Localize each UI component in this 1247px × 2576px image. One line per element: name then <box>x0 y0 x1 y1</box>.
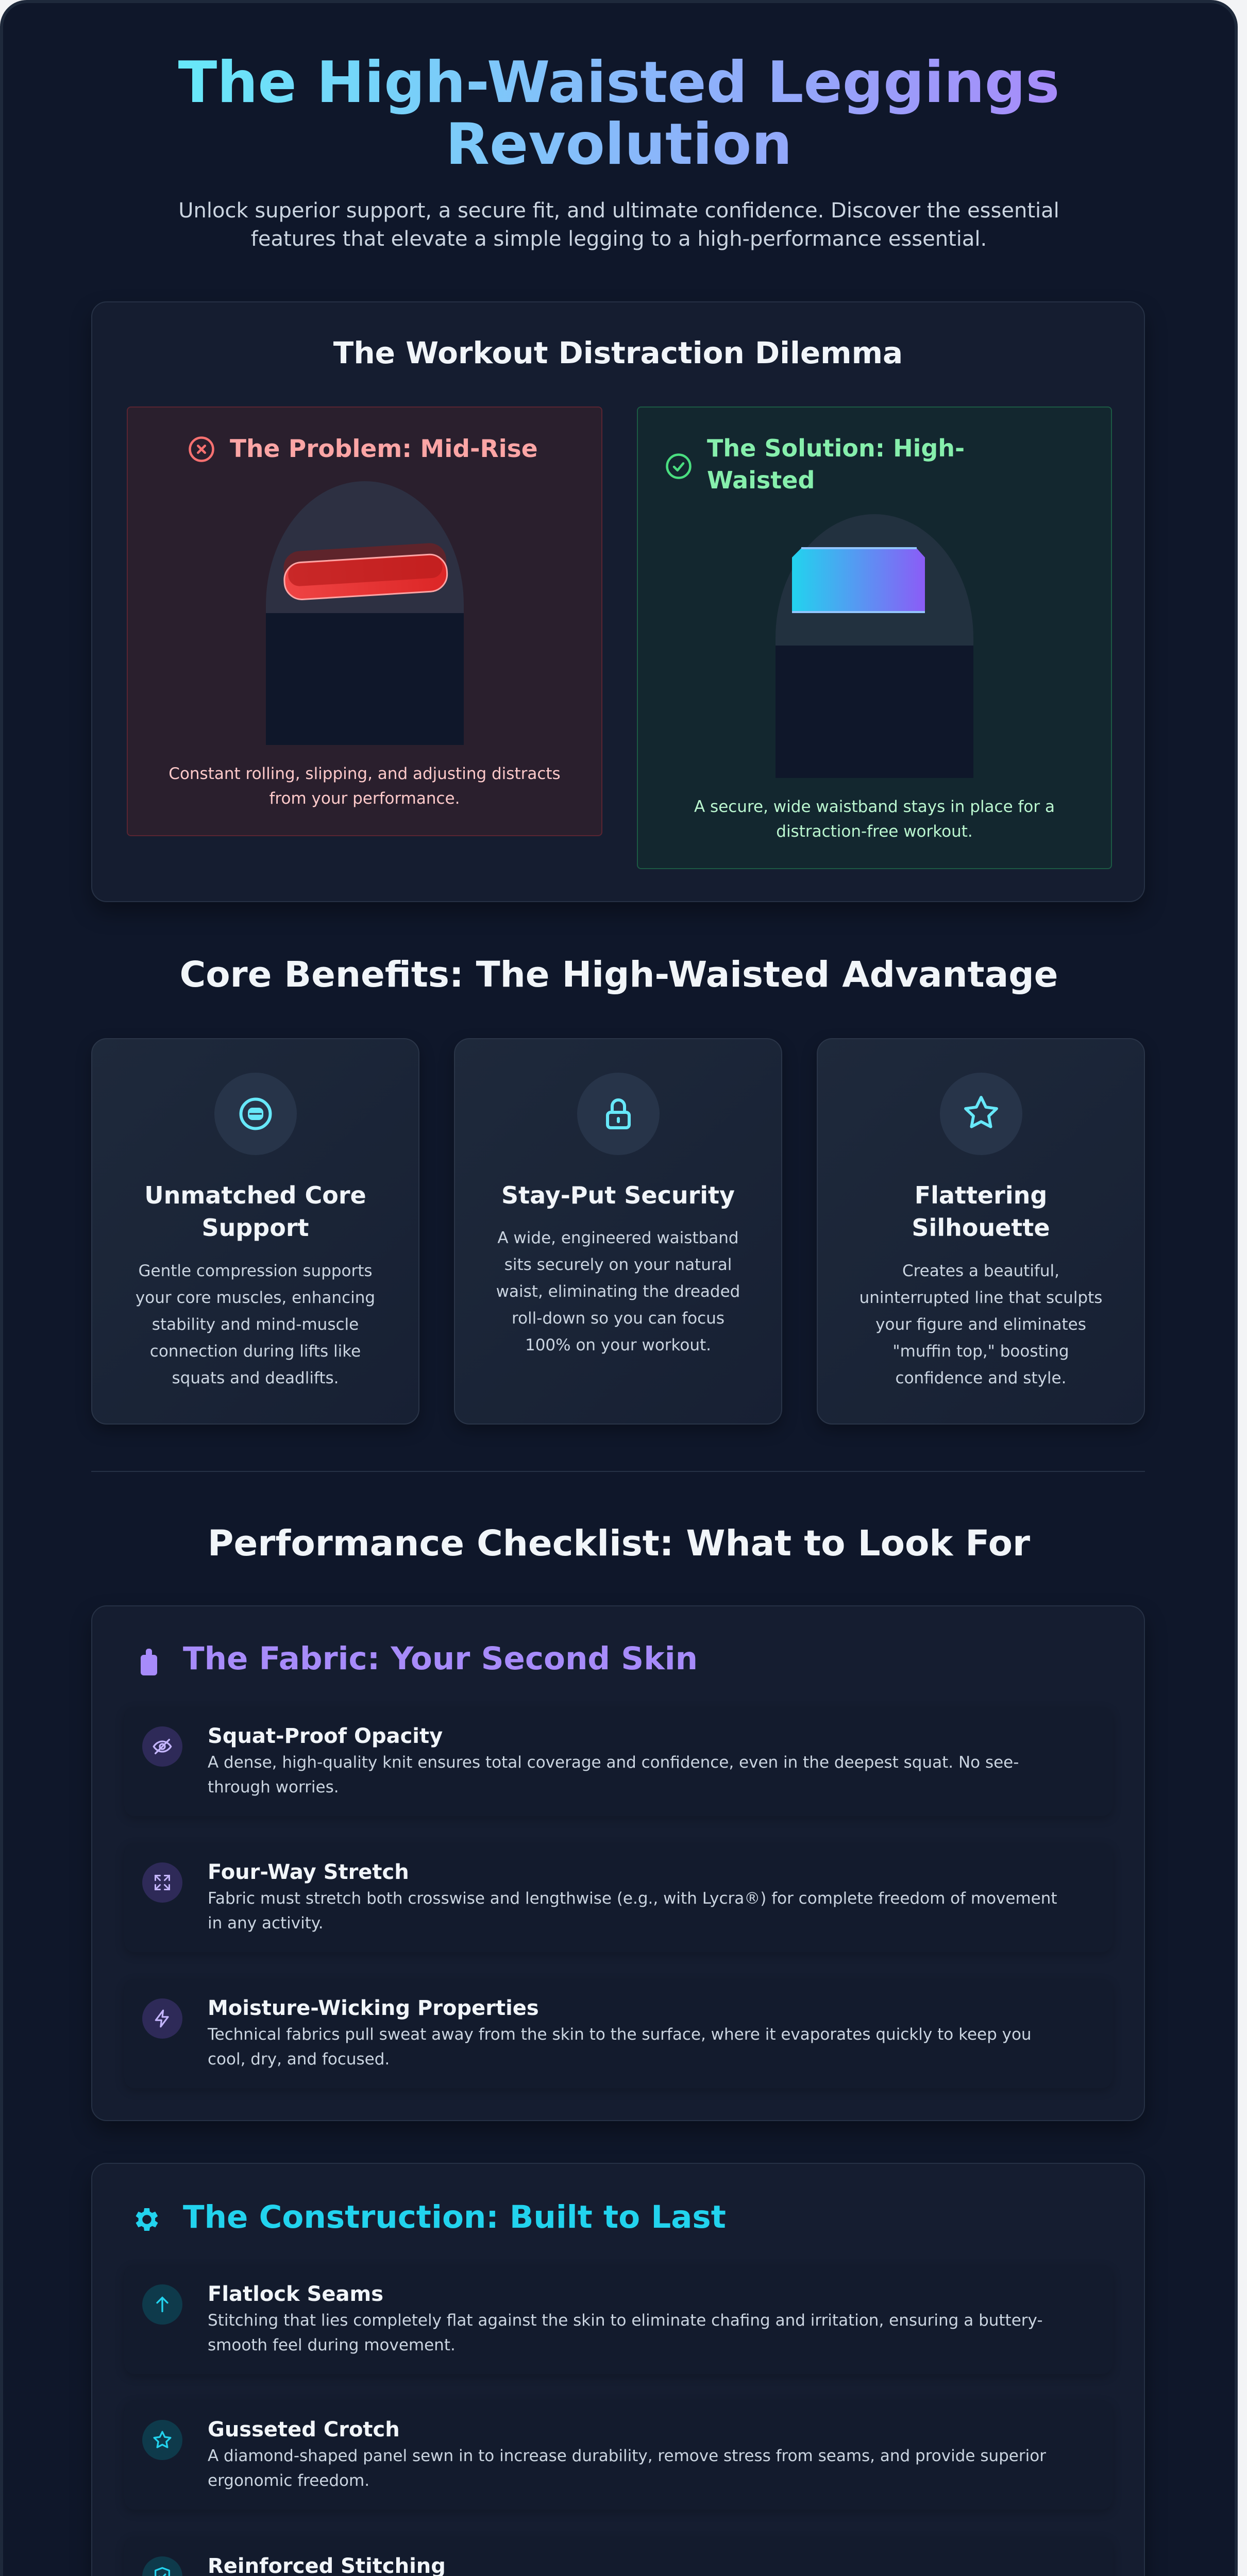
subtitle <box>178 199 1059 251</box>
title: Stay-Put Security <box>501 1181 735 1209</box>
text: squats and deadlifts. <box>172 1369 339 1387</box>
text: roll-down so you can focus <box>512 1309 724 1328</box>
item: flatlock seams: Flatlock Seams <box>208 2282 383 2306</box>
icon: star <box>142 2420 182 2460</box>
card: flattering silhouette <box>817 1038 1145 1425</box>
heading: performance checklist: Performance Checklist: What to Look For <box>208 1523 1030 1564</box>
title: Unmatched Core <box>144 1181 366 1209</box>
text: confidence and style. <box>896 1369 1066 1387</box>
illustration: mid-rise <box>266 481 464 745</box>
text: Gentle compression supports <box>138 1262 372 1280</box>
card: solution <box>637 406 1112 869</box>
panel: construction <box>91 2163 1145 2576</box>
text: Creates a beautiful, <box>902 1262 1059 1280</box>
icon: expand arrows <box>142 1862 182 1903</box>
item: squat-proof opacity <box>124 1707 1113 1816</box>
caption: solution: A secure, wide waistband stays in place for a <box>694 798 1055 816</box>
heading: solution <box>707 434 965 494</box>
text: waist, eliminating the dreaded <box>496 1282 740 1301</box>
item: four-way stretch: Four-Way Stretch <box>208 1860 409 1884</box>
heading: solution: Waisted <box>707 466 815 494</box>
text: your core muscles, enhancing <box>136 1289 375 1307</box>
item: flatlock seams: smooth feel during movement. <box>208 2336 456 2354</box>
icon: x circle <box>189 436 214 462</box>
caption: problem: Constant rolling, slipping, and adjusting distracts <box>168 765 561 783</box>
text: sits securely on your natural <box>504 1256 732 1274</box>
item: reinforced stitching <box>124 2537 1113 2576</box>
item: squat-proof opacity: Squat-Proof Opacity <box>208 1724 443 1748</box>
icon: core <box>214 1073 297 1155</box>
text <box>860 1262 1102 1387</box>
heading: construction: The Construction: Built to Last <box>183 2199 726 2235</box>
caption: problem: from your performance. <box>269 789 460 808</box>
item: squat-proof opacity: through worries. <box>208 1778 339 1797</box>
title: Flattering <box>915 1181 1047 1209</box>
icon: check circle <box>666 453 692 479</box>
text: A wide, engineered waistband <box>497 1229 739 1247</box>
item: four-way stretch <box>124 1843 1113 1952</box>
heading: dilemma: The Workout Distraction Dilemma <box>333 335 903 370</box>
item: flatlock seams: Stitching that lies completely flat against the skin to eliminate chafing and irritation, ensuring a buttery- <box>208 2311 1043 2330</box>
text <box>136 1262 375 1387</box>
item: four-way stretch: in any activity. <box>208 1914 324 1933</box>
item: gusseted crotch <box>124 2400 1113 2510</box>
text: "muffin top," boosting <box>892 1342 1069 1361</box>
subtitle: features that elevate a simple legging to a high-performance essential. <box>251 227 987 251</box>
icon: gear <box>136 2208 158 2231</box>
text: stability and mind-muscle <box>152 1315 359 1334</box>
caption: problem <box>168 765 561 808</box>
card: problem <box>127 406 602 836</box>
text: connection during lifts like <box>150 1342 361 1361</box>
card: core support <box>91 1038 419 1425</box>
text: 100% on your workout. <box>525 1336 711 1354</box>
heading: fabric: The Fabric: Your Second Skin <box>183 1640 698 1677</box>
icon: eye-off <box>142 1726 182 1767</box>
heading: problem: The Problem: Mid-Rise <box>230 435 538 463</box>
item: moisture-wicking: cool, dry, and focused. <box>208 2050 390 2069</box>
panel: workout distraction dilemma <box>91 301 1145 902</box>
icon: lightning <box>142 1998 182 2039</box>
icon: bottle <box>141 1649 157 1675</box>
text: your figure and eliminates <box>875 1315 1086 1334</box>
title: Revolution <box>446 111 792 178</box>
item: moisture-wicking: Moisture-Wicking Properties <box>208 1996 539 2020</box>
icon: star <box>940 1073 1022 1155</box>
item: gusseted crotch: Gusseted Crotch <box>208 2418 400 2442</box>
caption: solution <box>694 798 1055 841</box>
heading: core benefits: Core Benefits: The High-Waisted Advantage <box>180 954 1058 995</box>
item: flatlock seams <box>124 2265 1113 2374</box>
icon: arrow up <box>142 2284 182 2325</box>
text <box>496 1229 740 1354</box>
text: uninterrupted line that sculpts <box>860 1289 1102 1307</box>
subtitle: Unlock superior support, a secure fit, and ultimate confidence. Discover the essential <box>178 199 1059 223</box>
heading: solution: The Solution: High- <box>707 434 965 462</box>
icon: shield check <box>142 2556 182 2576</box>
panel: fabric <box>91 1605 1145 2121</box>
title: The High-Waisted Leggings <box>178 49 1059 116</box>
card: stay-put security <box>454 1038 782 1425</box>
title: Silhouette <box>912 1214 1050 1242</box>
item: gusseted crotch: A diamond-shaped panel sewn in to increase durability, remove stress from seams, and provide superior <box>208 2447 1046 2465</box>
icon: lock <box>577 1073 660 1155</box>
title <box>912 1181 1050 1242</box>
caption: solution: distraction-free workout. <box>776 822 973 841</box>
illustration: high-waisted <box>776 514 973 778</box>
item: four-way stretch: Fabric must stretch both crosswise and lengthwise (e.g., with Lycra®) for complete freedom of movement <box>208 1889 1057 1908</box>
title: Support <box>201 1214 309 1242</box>
title <box>144 1181 366 1242</box>
item: gusseted crotch: ergonomic freedom. <box>208 2471 369 2490</box>
item: moisture-wicking <box>124 1979 1113 2088</box>
title <box>178 49 1059 178</box>
item: moisture-wicking: Technical fabrics pull sweat away from the skin to the surface, where it evaporates quickly to keep you <box>208 2025 1032 2044</box>
item: squat-proof opacity: A dense, high-quality knit ensures total coverage and confidence, even in the deepest squat. No see- <box>208 1753 1019 1772</box>
